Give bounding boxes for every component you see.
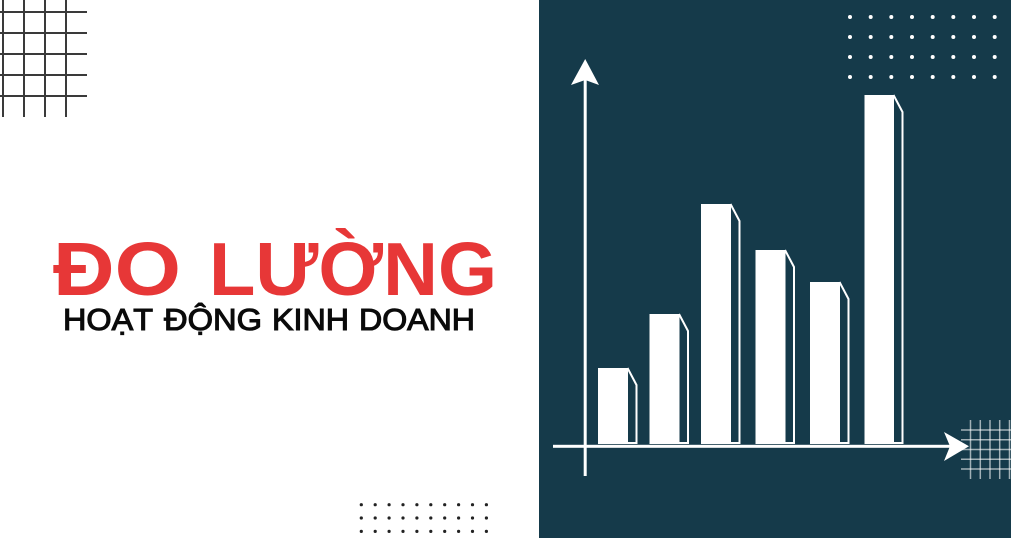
bar 1 bbox=[598, 368, 636, 443]
bar 3 bbox=[701, 204, 740, 443]
subtitle: HOẠT ĐỘNG KINH DOANH bbox=[63, 302, 475, 337]
bar 5 bbox=[810, 282, 848, 443]
arrow: vertical axis bbox=[571, 59, 599, 476]
decoration: top-right dot grid bbox=[848, 15, 997, 79]
decoration: bottom dot grid bbox=[360, 503, 488, 533]
subtitle: HOẠT ĐỘNG KINH DOANH: DOANH bbox=[359, 302, 475, 337]
arrow: horizontal axis bbox=[553, 432, 969, 461]
title: ĐO LƯỜNG: ĐO bbox=[53, 227, 181, 311]
subtitle: HOẠT ĐỘNG KINH DOANH: HOẠT bbox=[63, 302, 153, 337]
title: ĐO LƯỜNG: LƯỜNG bbox=[209, 227, 497, 311]
bar 6 bbox=[864, 95, 902, 443]
decoration: top-left line grid bbox=[0, 0, 87, 117]
title: ĐO LƯỜNG bbox=[53, 227, 497, 311]
bar chart bbox=[598, 95, 902, 443]
bar 4 bbox=[756, 250, 794, 443]
subtitle: HOẠT ĐỘNG KINH DOANH: KINH bbox=[272, 302, 349, 337]
decoration: bottom-right small grid bbox=[961, 420, 1011, 479]
bar 2 bbox=[650, 314, 688, 443]
subtitle: HOẠT ĐỘNG KINH DOANH: ĐỘNG bbox=[164, 302, 262, 337]
panel: dark teal chart background bbox=[539, 0, 1011, 538]
